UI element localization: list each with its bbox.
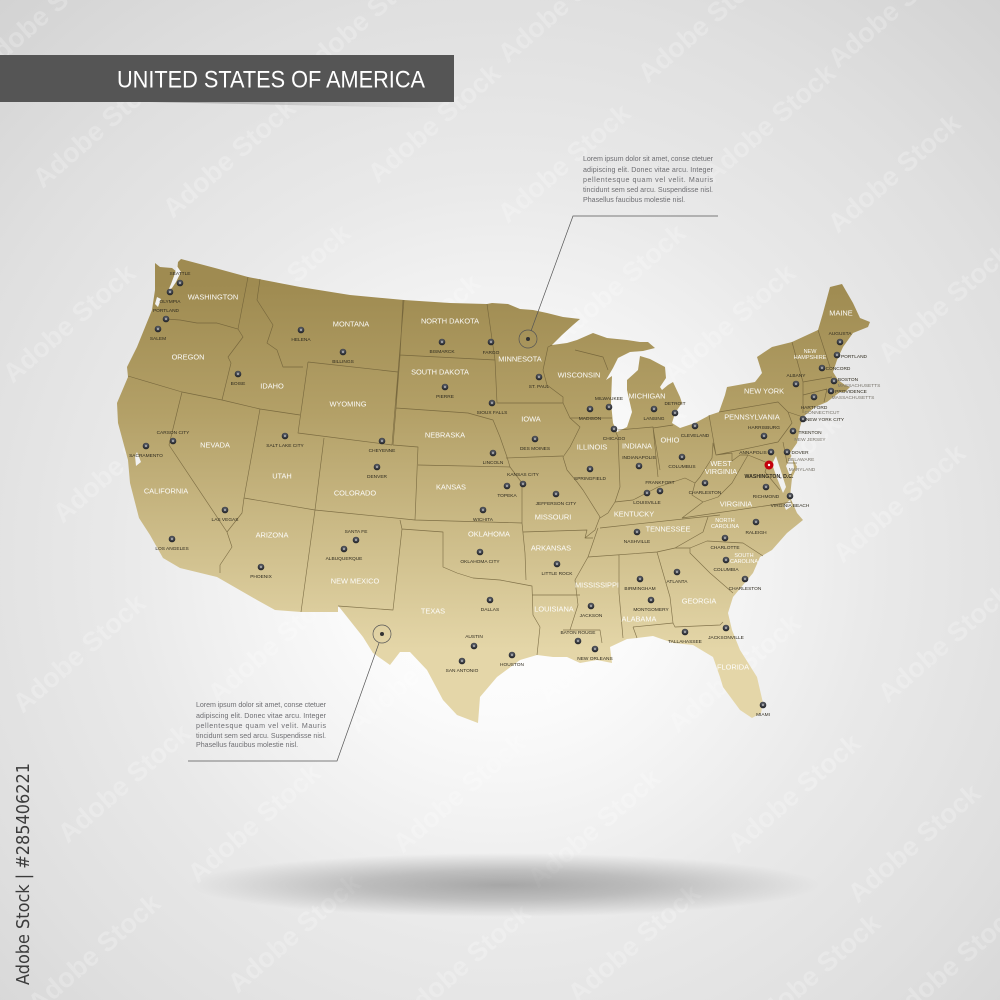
city labels: DETROIT [664, 401, 686, 407]
watermark pattern: Adobe Stock [182, 427, 327, 559]
state labels: TENNESSEE [646, 524, 690, 534]
state labels: GEORGIA [682, 596, 716, 606]
city labels: FRANKFORT [645, 480, 675, 486]
callout text: top right: pellentesque quam vel velit. Mauris [583, 176, 713, 184]
map landmass [117, 259, 870, 723]
state labels: NEBRASKA [425, 430, 465, 440]
city labels: BOISE [231, 381, 245, 387]
watermark pattern: Adobe Stock [212, 217, 357, 349]
watermark pattern: Adobe Stock [222, 867, 367, 999]
city labels: LAS VEGAS [212, 517, 238, 523]
city labels: FARGO [483, 350, 500, 356]
state labels: INDIANA [622, 442, 652, 450]
watermark pattern: Adobe Stock [157, 92, 302, 224]
state labels: UTAH [272, 472, 292, 480]
callout text: top right: adipiscing elit. Donec vitae arcu. Integer [583, 166, 714, 174]
city labels: RALEIGH [745, 530, 767, 536]
state labels: NORTH DAKOTA [421, 316, 479, 326]
state labels: CALIFORNIA [144, 486, 188, 496]
city labels: PORTLAND [153, 308, 180, 314]
callout text: bottom left: Phasellus faucibus molestie nisl. [196, 741, 298, 749]
city labels: DENVER [367, 474, 388, 480]
state labels: IDAHO [260, 382, 284, 390]
watermark pattern: Adobe Stock [522, 762, 667, 894]
state labels: OHIO [661, 436, 680, 444]
city labels: TOPEKA [497, 493, 517, 499]
state labels: NEVADA [200, 440, 230, 450]
state labels [144, 292, 853, 672]
city labels: SAN ANTONIO [446, 668, 479, 674]
city labels: SPRINGFIELD [574, 476, 607, 482]
city labels: PHOENIX [250, 574, 273, 580]
city labels: CHARLOTTE [710, 545, 740, 551]
watermark pattern: Adobe Stock [382, 397, 527, 529]
capital pin: Washington D.C. [764, 460, 774, 470]
state labels: MICHIGAN [629, 392, 665, 400]
city labels: BIRMINGHAM [624, 586, 656, 592]
watermark pattern: Adobe Stock [662, 607, 807, 739]
city labels: BILLINGS [332, 359, 354, 365]
state labels: MINNESOTA [498, 354, 542, 364]
state labels: ARKANSAS [531, 544, 571, 552]
city labels: NASHVILLE [624, 539, 650, 545]
city labels: SANTA FE [345, 529, 367, 535]
city labels: CHEYENNE [369, 448, 395, 454]
city labels: HARRISBURG [748, 425, 780, 431]
city labels: WICHITA [473, 517, 494, 523]
callout text: bottom left: adipiscing elit. Donec vitae arcu. Integer [196, 712, 327, 720]
callout text: bottom left: pellentesque quam vel velit. Mauris [196, 722, 326, 730]
state labels: CAROLINA [711, 524, 739, 530]
city labels: KANSAS CITY [507, 472, 540, 478]
city labels: DES MOINES [520, 446, 550, 452]
city labels: CHARLESTON [689, 490, 722, 496]
state labels: KENTUCKY [614, 510, 654, 518]
city labels: JACKSONVILLE [708, 635, 744, 641]
city labels: LOS ANGELES [155, 546, 189, 552]
city labels: SALT LAKE CITY [266, 443, 305, 449]
watermark pattern: Adobe Stock [202, 577, 347, 709]
state labels: WYOMING [330, 400, 367, 408]
city labels: SIOUX FALLS [477, 410, 507, 416]
state labels: MONTANA [333, 320, 369, 328]
state labels: FLORIDA [717, 662, 749, 672]
grey small-state labels: CONNECTICUT [805, 410, 840, 416]
grey small-state labels: MASSACHUSETTS [832, 395, 874, 401]
city labels: BATON ROUGE [560, 630, 596, 636]
city labels: HELENA [291, 337, 311, 343]
city labels: TRENTON [798, 430, 822, 436]
city labels: DOVER [791, 450, 809, 456]
city labels: VIRGINIA BEACH [771, 503, 810, 509]
state labels: NEW MEXICO [331, 576, 379, 586]
city labels: CLEVELAND [681, 433, 710, 439]
watermark pattern: Adobe Stock [492, 97, 637, 229]
watermark pattern: Adobe Stock [52, 717, 197, 849]
city labels: HARTFORD [801, 405, 828, 411]
city labels: JEFFERSON CITY [536, 501, 577, 507]
state labels: OKLAHOMA [468, 530, 510, 538]
watermark pattern: Adobe Stock [182, 757, 327, 889]
watermark pattern: Adobe Stock [362, 57, 507, 189]
state labels: CAROLINA [730, 559, 758, 565]
state labels: WISCONSIN [558, 370, 600, 380]
city labels: PIERRE [436, 394, 454, 400]
city labels: LOUISVILLE [633, 500, 661, 506]
city labels: TALLAHASSEE [668, 639, 702, 645]
state borders [128, 277, 832, 655]
city labels: BOSTON [838, 377, 859, 383]
city labels: WASHINGTON, D.C. [745, 474, 794, 480]
city labels: CHICAGO [603, 436, 625, 442]
watermark pattern: Adobe Stock [547, 397, 692, 529]
callout text: bottom left: Lorem ipsum dolor sit amet, conse ctetuer [196, 701, 327, 709]
state labels: ALABAMA [622, 614, 657, 624]
state labels: MISSOURI [535, 512, 571, 522]
title: UNITED STATES OF AMERICA [117, 66, 425, 94]
city labels: INDIANAPOLIS [622, 455, 656, 461]
city labels: MILWAUKEE [595, 396, 623, 402]
water inlets [135, 266, 794, 510]
grey small-state labels [788, 383, 880, 473]
state labels: WEST [710, 459, 732, 468]
city labels: NEW YORK CITY [806, 417, 845, 423]
grey small-state labels: MASSACHUSETTS [838, 383, 880, 389]
watermark pattern: Adobe Stock [722, 727, 867, 859]
city labels: MADISON [579, 416, 602, 422]
city labels: COLUMBIA [713, 567, 739, 573]
city labels: PROVIDENCE [835, 389, 867, 395]
state labels: ILLINOIS [577, 442, 607, 452]
state labels: NORTH [715, 518, 735, 524]
state labels: WASHINGTON [188, 292, 238, 302]
callout text: top right: Lorem ipsum dolor sit amet, conse ctetuer [583, 155, 714, 163]
watermark pattern: Adobe Stock [547, 217, 692, 349]
watermark pattern: Adobe Stock [342, 607, 487, 739]
watermark pattern: Adobe Stock [532, 577, 677, 709]
state labels: VIRGINIA [720, 500, 752, 508]
watermark pattern: Adobe Stock [842, 777, 987, 909]
watermark pattern: Adobe Stock [47, 397, 192, 529]
grey small-state labels: DELAWARE [788, 457, 814, 463]
city labels: CONCORD [826, 366, 851, 372]
city labels: SALEM [150, 336, 166, 342]
callout text: top right [583, 155, 714, 204]
state labels: HAMPSHIRE [794, 355, 827, 361]
city labels: JACKSON [580, 613, 603, 619]
city labels: LITTLE ROCK [542, 571, 573, 577]
city labels: ATLANTA [667, 579, 688, 585]
state labels: ARIZONA [256, 530, 288, 540]
city labels: ANNAPOLIS [739, 450, 767, 456]
watermark pattern: Adobe Stock [657, 257, 802, 389]
watermark pattern: Adobe Stock [7, 587, 152, 719]
state labels: COLORADO [334, 488, 376, 498]
state labels: NEW [804, 349, 817, 355]
city labels: CARSON CITY [157, 430, 190, 436]
callout text: bottom left [196, 701, 327, 749]
city labels: RICHMOND [753, 494, 780, 500]
callout text: top right: Phasellus faucibus molestie nisl. [583, 196, 685, 204]
city labels: NEW ORLEANS [577, 656, 613, 662]
city labels: OLYMPIA [160, 299, 181, 305]
state labels: VIRGINIA [705, 467, 737, 476]
watermark pattern: Adobe Stock [0, 257, 142, 389]
state labels: MAINE [829, 308, 853, 318]
city labels [129, 271, 868, 718]
city labels: ALBUQUERQUE [326, 556, 362, 562]
city labels: AUSTIN [465, 634, 483, 640]
city labels: LINCOLN [483, 460, 504, 466]
city labels: SEATTLE [170, 271, 190, 277]
city labels: ALBANY [787, 373, 806, 379]
grey small-state labels: MARYLAND [789, 467, 816, 473]
stock credit: Adobe Stock | #285406221 [13, 763, 34, 985]
state labels: KANSAS [436, 482, 466, 492]
state labels: MISSISSIPPI [575, 580, 619, 590]
watermark pattern: Adobe Stock [827, 437, 972, 569]
watermark pattern: Adobe Stock [342, 267, 487, 399]
city pins [143, 280, 843, 708]
city labels: COLUMBUS [668, 464, 696, 470]
grey small-state labels: NEW JERSEY [794, 437, 826, 443]
state labels: LOUISIANA [534, 604, 574, 614]
map of the United States [117, 216, 880, 761]
state labels: TEXAS [421, 606, 445, 616]
city labels: OKLAHOMA CITY [460, 559, 500, 565]
city labels: HOUSTON [500, 662, 524, 668]
watermark pattern: Adobe Stock [387, 727, 532, 859]
callout text: top right: tincidunt sem sed arcu. Suspendisse nisl. [583, 186, 713, 194]
pin highlights [145, 282, 841, 706]
state labels: SOUTH DAKOTA [411, 368, 469, 376]
state labels: NEW YORK [744, 386, 784, 396]
watermark pattern: Adobe Stock [697, 57, 842, 189]
callout 2 leader [188, 625, 391, 761]
state labels: SOUTH [734, 553, 754, 559]
state labels: PENNSYLVANIA [724, 412, 780, 422]
city labels: AUGUSTA [829, 331, 852, 337]
city labels: PORTLAND [841, 354, 868, 360]
city labels: BISMARCK [429, 349, 455, 355]
watermark pattern: Adobe Stock [702, 407, 847, 539]
state labels: OREGON [172, 352, 204, 362]
ground shadow [190, 853, 820, 917]
city labels: CHARLESTON [729, 586, 762, 592]
title banner [0, 55, 454, 108]
watermark pattern: Adobe Stock [822, 107, 967, 239]
city labels: ST. PAUL [529, 384, 550, 390]
state labels: IOWA [521, 414, 541, 424]
city labels: SACRAMENTO [129, 453, 163, 459]
city labels: DALLAS [481, 607, 499, 613]
callout 1 leader [519, 216, 718, 348]
city labels: LANSING [643, 416, 665, 422]
watermark pattern: Adobe Stock [27, 62, 172, 194]
city labels: MIAMI [756, 712, 770, 718]
callout text: bottom left: tincidunt sem sed arcu. Suspendisse nisl. [196, 732, 326, 740]
city labels: MONTGOMERY [633, 607, 669, 613]
